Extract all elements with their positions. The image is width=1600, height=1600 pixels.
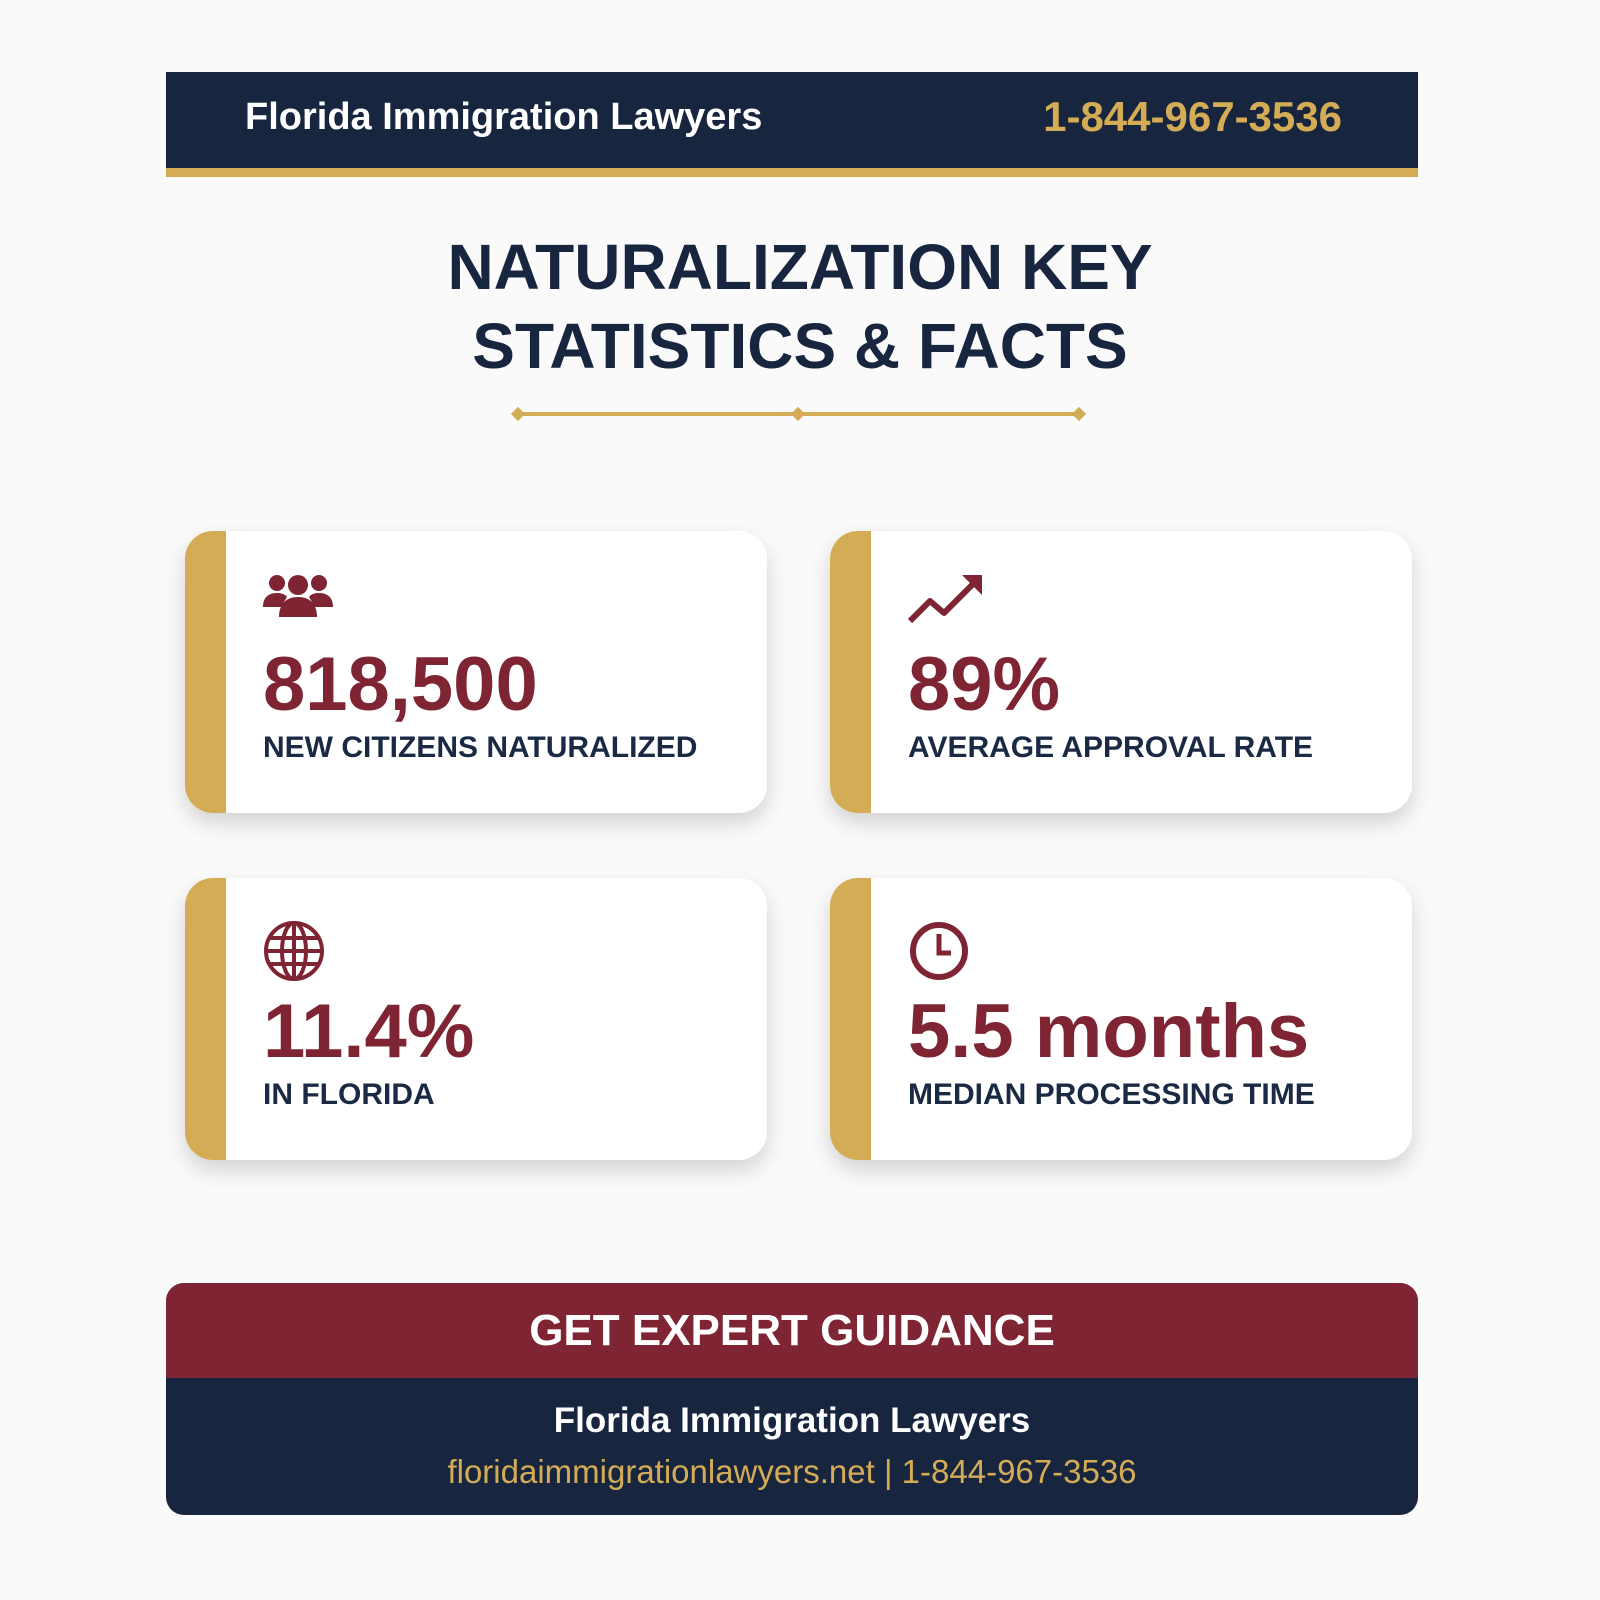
stat number: 5.5 months: [908, 989, 1309, 1074]
title: [447, 231, 1153, 382]
icon: globe: [264, 921, 324, 981]
icon: clock: [910, 922, 968, 980]
icon: trend arrow: [908, 575, 982, 624]
stat label: AVERAGE APPROVAL RATE: [908, 731, 1313, 764]
card: florida: [185, 878, 767, 1160]
stat label: NEW CITIZENS NATURALIZED: [263, 731, 697, 764]
header firm name: Florida Immigration Lawyers: [245, 96, 762, 138]
icon: people: [263, 575, 333, 617]
stat number: 11.4%: [263, 989, 474, 1074]
card: processing time: [830, 878, 1412, 1160]
title divider: [511, 407, 1086, 421]
header phone: 1-844-967-3536: [1043, 93, 1342, 140]
stat number: 818,500: [263, 642, 538, 727]
card: new citizens: [185, 531, 767, 813]
title: STATISTICS & FACTS: [472, 310, 1128, 382]
stat label: MEDIAN PROCESSING TIME: [908, 1078, 1315, 1111]
CTA box: [166, 1283, 1418, 1515]
title: NATURALIZATION KEY: [447, 231, 1153, 303]
CTA contact: floridaimmigrationlawyers.net | 1-844-967-3536: [447, 1453, 1137, 1490]
CTA heading: GET EXPERT GUIDANCE: [529, 1306, 1055, 1355]
CTA firm name: Florida Immigration Lawyers: [554, 1401, 1030, 1440]
stat label: IN FLORIDA: [263, 1078, 435, 1111]
CTA heading: [166, 1283, 1418, 1378]
header bar: [166, 72, 1418, 177]
stat number: 89%: [908, 642, 1060, 727]
card: approval rate: [830, 531, 1412, 813]
